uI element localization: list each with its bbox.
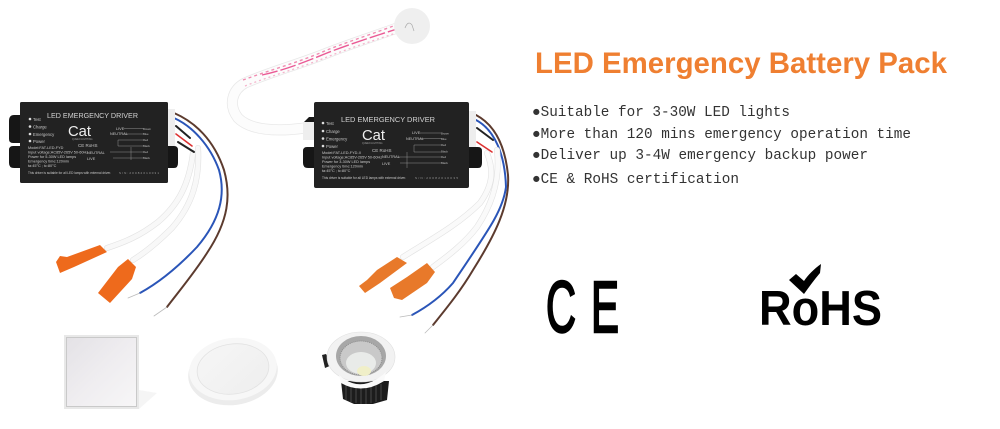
left driver case: QUEEN LIGHTING: [72, 138, 93, 141]
flat ribbon cable: [232, 25, 397, 130]
left driver case: NEUTRAL: [87, 151, 105, 155]
left driver case: Red: [143, 138, 149, 142]
icon: CE mark: C: [546, 268, 576, 348]
right driver case: Input voltage:AC85V-265V 50-60Hz: [322, 156, 382, 160]
right driver case: Power for 3-30W LED lamps: [322, 160, 370, 164]
right driver case: Emergency time:120min: [322, 164, 363, 168]
left driver case: Black: [143, 144, 150, 148]
right driver case: Red: [441, 155, 447, 159]
right orange connector 1: [359, 257, 407, 293]
left driver case: LED EMERGENCY DRIVER: [47, 113, 138, 120]
left driver case: S/N:20082010031: [119, 171, 159, 175]
right orange connector 2: [390, 263, 435, 300]
left driver case: CE RoHS: [78, 143, 98, 148]
right driver case: CE RoHS: [372, 148, 392, 153]
right driver case: S/N:20082010035: [415, 176, 458, 180]
left driver case: Emergency: [33, 132, 55, 137]
left orange connector 2: [98, 259, 136, 303]
left driver case: LIVE: [116, 127, 125, 131]
feature: backup power: ●Deliver up 3-4W emergency backup power: [532, 148, 868, 164]
right driver cables: [400, 115, 508, 333]
product: left emergency driver: [9, 102, 228, 316]
feature: wattage: ●Suitable for 3-30W LED lights: [532, 105, 790, 121]
feature: certification: ●CE & RoHS certification: [532, 172, 739, 188]
left driver case: Test: [33, 117, 42, 122]
right driver case: LIVE: [412, 131, 421, 135]
left driver cables: [107, 113, 228, 316]
right driver case: LIVE: [382, 162, 391, 166]
right driver side tabs: [303, 117, 482, 168]
left driver case: Power: [33, 139, 45, 144]
right driver case: LED EMERGENCY DRIVER: [341, 117, 435, 124]
left driver case: Red: [143, 150, 149, 154]
right driver case: Cat: [362, 127, 386, 144]
left driver case: Model:FAT-LED-FYD: [28, 146, 64, 150]
left driver case: Power for 5-30W LED lamps: [28, 155, 76, 159]
left driver case: Cat: [68, 123, 92, 140]
product: recessed downlight: [322, 332, 395, 404]
right driver terminal blocks: [303, 111, 476, 149]
right driver case: Power: [326, 144, 338, 149]
left driver case: Input voltage:AC85V-265V 50-60Hz: [28, 150, 88, 154]
left driver case: NEUTRAL: [110, 132, 128, 136]
left driver case: LIVE: [87, 157, 96, 161]
product: round LED panel: [184, 332, 282, 411]
left driver case: Charge: [33, 124, 47, 130]
left driver case: This driver is suitable for all LED lamps with external driver.: [28, 171, 111, 175]
left driver case: Brown: [143, 127, 151, 131]
right driver case: Black: [441, 150, 448, 154]
right driver case: Charge: [326, 129, 340, 134]
right driver case: Black: [441, 161, 448, 165]
right driver case: Brown: [441, 132, 449, 136]
title: LED Emergency Battery Pack: [535, 47, 947, 80]
icon: RoHS mark: RoHS: [759, 282, 882, 336]
right driver case: NEUTRAL: [406, 137, 424, 141]
left driver side tabs: [9, 115, 178, 168]
right driver case: [314, 102, 469, 188]
left driver case: Blue: [143, 132, 149, 136]
right driver case: ta:45°C ; tc:80°C: [322, 169, 351, 173]
left driver case: [20, 102, 168, 183]
right driver case: Emergency: [326, 136, 348, 142]
icon: CE mark: E: [591, 268, 619, 348]
right driver case: Blue: [441, 137, 447, 141]
left driver case: ta:45°C ; tc:80°C: [28, 164, 57, 168]
product: square LED panel: [64, 335, 157, 409]
right driver case: NEUTRAL: [382, 155, 400, 159]
left driver case: Black: [143, 156, 150, 160]
right driver case: Red: [441, 143, 447, 147]
left driver case: Emergency time:120min: [28, 160, 69, 164]
left orange connector 1: [56, 245, 107, 273]
sensor disc: [394, 8, 430, 44]
right driver case: QUEEN LIGHTING: [362, 142, 383, 145]
product: right emergency driver with sensor ribbon: [232, 8, 508, 333]
feature list: [532, 105, 911, 188]
feature: emergency time: ●More than 120 mins emergency operation time: [532, 127, 911, 143]
left driver terminal block: [168, 109, 175, 147]
right driver case: This driver is suitable for all LED lamps with external driver.: [322, 176, 406, 180]
right driver case: Model:FAT-LED-FYD-II: [322, 151, 361, 155]
right driver case: Test: [326, 121, 335, 126]
